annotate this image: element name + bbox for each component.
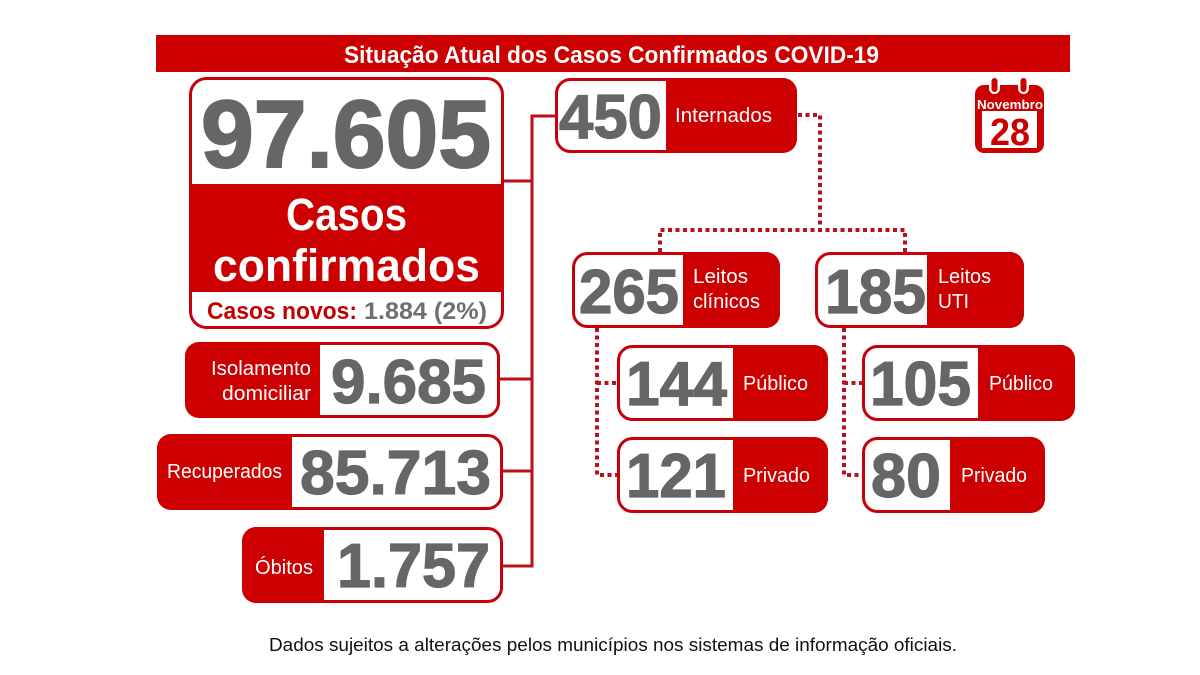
clinicos privado number: 121 — [626, 442, 726, 511]
footnote: Dados sujeitos a alterações pelos municípios nos sistemas de informação oficiais. — [269, 635, 957, 655]
UTI privado number: 80 — [871, 442, 941, 511]
obitos number: 1.757 — [337, 532, 490, 601]
panel: internados — [556, 78, 797, 153]
dotted connector: leitos clinicos — [597, 328, 617, 475]
clinicos publico number: 144 — [626, 350, 727, 419]
panel: clinicos privado — [618, 437, 828, 513]
UTI publico number: 105 — [870, 350, 971, 419]
total cases number: 97.605 — [201, 81, 491, 188]
header bar — [156, 35, 1070, 72]
recuperados number: 85.713 — [300, 439, 491, 508]
calendar day: 28 — [990, 112, 1030, 154]
casos label: Casos — [286, 189, 407, 240]
panel: UTI privado — [864, 437, 1045, 513]
header bar: Situação Atual dos Casos Confirmados COVID-19 — [344, 42, 879, 69]
panel: leitos clinicos: clínicos — [693, 291, 760, 313]
isolamento number: 9.685 — [331, 348, 486, 417]
UTI privado label: Privado — [961, 465, 1027, 487]
icon: calendar — [975, 78, 1044, 154]
panel: leitos UTI: UTI — [938, 291, 969, 313]
new cases value: 1.884 (2%) — [364, 298, 487, 325]
leitos clinicos label: Leitos — [693, 266, 748, 288]
dotted connector: leitos UTI — [844, 328, 862, 475]
panel: UTI publico — [864, 345, 1075, 421]
clinicos privado label: Privado — [743, 465, 810, 487]
domiciliar label: domiciliar — [222, 383, 311, 405]
leitos UTI number: 185 — [825, 258, 926, 327]
panel: recuperados — [157, 434, 502, 510]
new cases label: Casos novos: — [207, 298, 357, 325]
leitos clinicos number: 265 — [579, 258, 679, 327]
internados number: 450 — [559, 83, 662, 152]
calendar month: Novembro — [977, 97, 1043, 112]
confirmados label: confirmados — [213, 240, 480, 291]
internados label: Internados — [675, 105, 772, 127]
panel: clinicos publico — [618, 345, 828, 421]
panel: isolamento domiciliar — [185, 342, 498, 418]
obitos label: Óbitos — [255, 556, 313, 579]
panel: obitos — [242, 527, 502, 603]
leitos UTI label: Leitos — [938, 266, 991, 288]
panel: leitos clinicos — [574, 252, 780, 328]
solid connector lines — [500, 116, 555, 566]
panel: leitos UTI — [816, 252, 1024, 328]
panel: casos confirmados — [190, 78, 503, 328]
recuperados label: Recuperados — [167, 461, 282, 483]
isolamento label: Isolamento — [211, 358, 311, 380]
dotted connector: internados to beds — [660, 115, 905, 252]
UTI publico label: Público — [989, 373, 1053, 395]
clinicos publico label: Público — [743, 373, 808, 395]
